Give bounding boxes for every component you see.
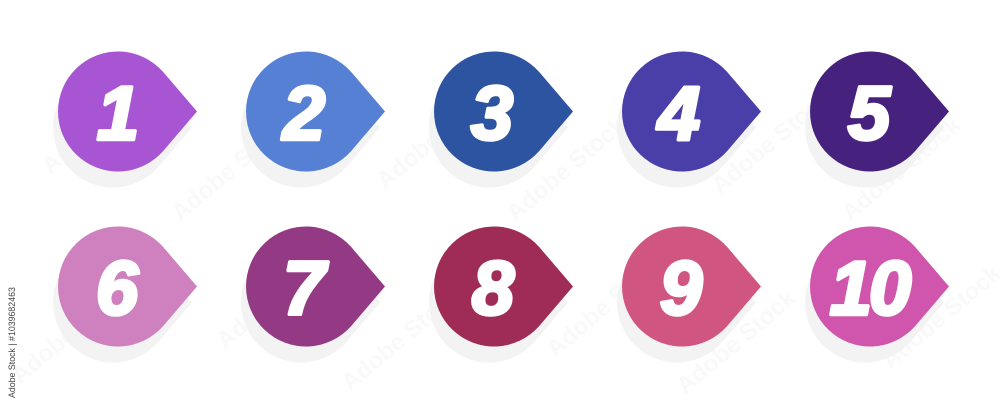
background watermarks: Adobe Stock — [7, 274, 137, 390]
badge 6: 6 — [96, 246, 139, 332]
badge 3: 3 — [471, 72, 513, 156]
background watermarks: Adobe Stock — [672, 284, 802, 400]
background watermarks: Adobe Stock — [337, 281, 467, 397]
badge 4: 4 — [656, 72, 700, 156]
background watermarks: Adobe Stock — [167, 111, 297, 227]
background watermarks: Adobe Stock — [542, 247, 672, 363]
background watermarks: Adobe Stock — [212, 239, 342, 355]
badge 1: 1 — [97, 72, 139, 156]
background watermarks: Adobe Stock — [37, 64, 167, 180]
badge 1 — [53, 51, 197, 187]
badge 5: 5 — [848, 72, 892, 156]
badge 9: 9 — [660, 246, 702, 332]
background watermarks: Adobe Stock — [502, 111, 632, 227]
badge 5 — [805, 51, 949, 187]
badge 10: 10 — [830, 246, 911, 332]
badge 8 — [429, 226, 573, 362]
badge 3 — [429, 51, 573, 187]
badge 2 — [241, 51, 385, 187]
badge 6 — [53, 226, 197, 362]
badge 2: 2 — [281, 72, 325, 156]
badge 4 — [617, 51, 761, 187]
badge 7: 7 — [283, 246, 329, 332]
stock credit: Adobe Stock | #1039682463 — [7, 287, 17, 398]
background watermarks: Adobe Stock — [837, 111, 967, 227]
background watermarks: Adobe Stock — [372, 79, 502, 195]
badge 7 — [241, 226, 385, 362]
badge 8: 8 — [472, 246, 515, 332]
background watermarks: Adobe Stock — [707, 84, 837, 200]
badge 9 — [617, 226, 761, 362]
badge 10 — [805, 226, 949, 362]
